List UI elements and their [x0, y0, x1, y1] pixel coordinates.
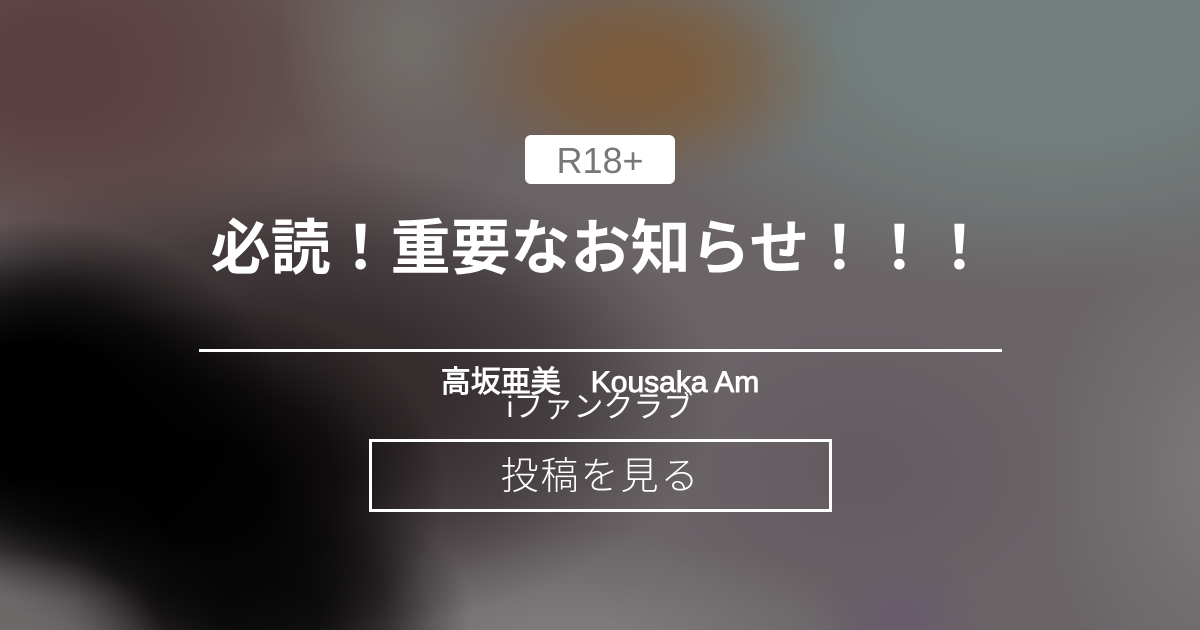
divider line — [199, 349, 1002, 352]
badge: R18+ — [525, 135, 675, 184]
creator name: iファンクラブ — [507, 391, 693, 424]
creator name: 高坂亜美 Kousaka Am — [441, 366, 759, 399]
badge: R18+: R18+ — [556, 140, 644, 181]
title: 必読！重要なお知らせ！！！ — [211, 215, 989, 282]
creator name — [441, 366, 759, 424]
button: view post — [369, 439, 832, 512]
button: view post: 投稿を見る — [500, 456, 700, 498]
